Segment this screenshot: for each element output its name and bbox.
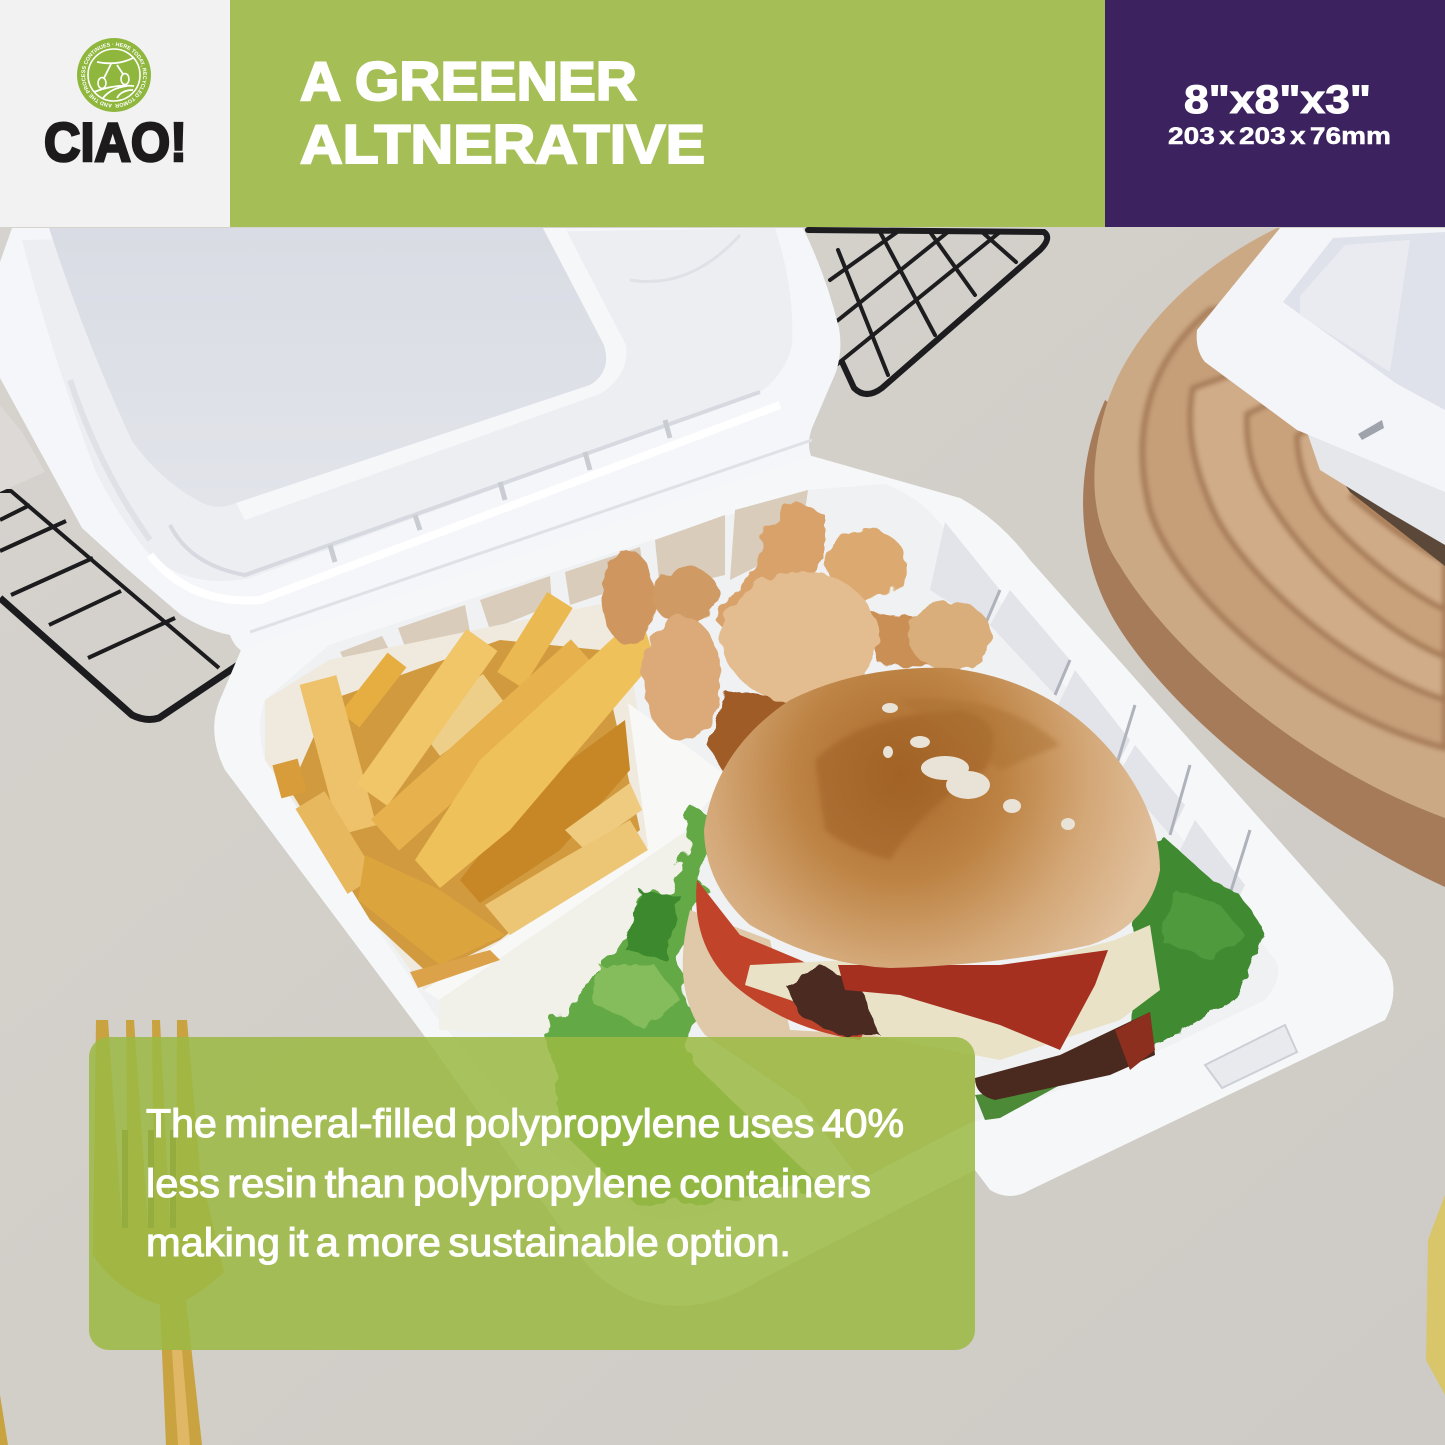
header: dimensions panel	[1105, 0, 1445, 227]
food: lettuce	[545, 805, 1265, 1208]
header: title panel	[230, 0, 1105, 227]
hinge latch	[1205, 1025, 1297, 1088]
gold fork	[93, 1020, 224, 1445]
inner wall	[260, 484, 1278, 1219]
callout text: less resin than polypropylene containers	[146, 1162, 871, 1206]
lid ridges	[70, 235, 812, 632]
wooden board	[1083, 228, 1445, 887]
callout panel	[89, 1037, 975, 1350]
dish divider	[424, 703, 728, 1000]
container base	[214, 456, 1393, 1306]
callout text: making it a more sustainable option.	[146, 1221, 791, 1265]
callout text: The mineral-filled polypropylene uses 40%	[146, 1102, 904, 1146]
header: logo panel	[0, 0, 230, 227]
fries compartment floor	[265, 600, 648, 990]
food: burger	[683, 668, 1160, 1180]
callout text	[146, 1102, 904, 1265]
dimensions in inches: 8"x8"x3"	[1184, 78, 1371, 122]
wire rack: left	[0, 491, 241, 719]
wire rack: top	[808, 230, 1047, 394]
food: fries	[285, 600, 655, 988]
title: A GREENER	[300, 50, 637, 112]
logo: wordmark: CIAO!	[44, 111, 187, 173]
title	[300, 50, 705, 175]
side box: far left	[0, 405, 45, 492]
container lid	[0, 228, 840, 655]
glass at right edge	[1426, 1195, 1445, 1395]
ribs on wall	[340, 490, 808, 675]
second container: top right	[1197, 228, 1445, 566]
dimensions in millimetres: 203 x 203 x 76mm	[1168, 123, 1391, 150]
title: ALTNERATIVE	[300, 113, 705, 175]
gold knife edge	[0, 1395, 8, 1445]
logo: olive badge	[77, 38, 151, 112]
food: fried chicken	[602, 500, 992, 775]
fries shadow	[290, 640, 640, 975]
